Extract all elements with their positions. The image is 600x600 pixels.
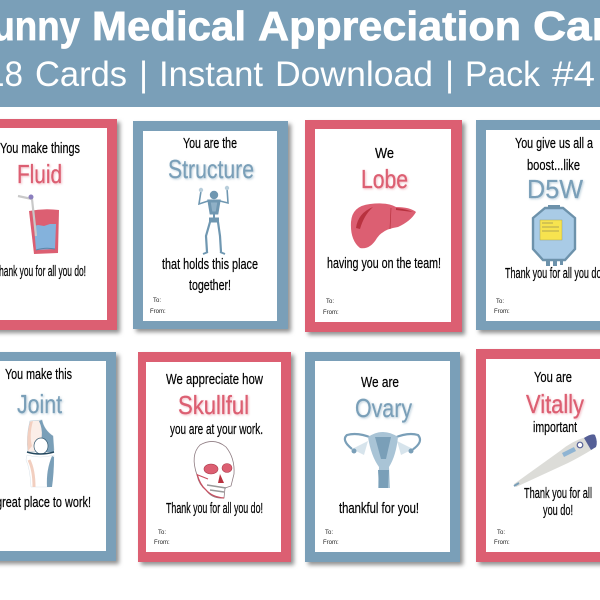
- subtitle: #4: [552, 55, 595, 94]
- icon: glass with straw: [18, 194, 59, 254]
- icon: liver: [351, 203, 416, 248]
- card: Skullful: you are at your work.: [170, 421, 263, 438]
- icon: uterus: [345, 432, 420, 488]
- card: Structure: Structure: [168, 154, 254, 184]
- card: Ovary: thankful for you!: [339, 500, 419, 517]
- card: D5W: [476, 120, 600, 330]
- card: Vitally: important: [533, 419, 578, 436]
- card: Vitally: You are: [534, 369, 572, 386]
- card: Skullful: To:: [158, 530, 166, 536]
- card: Fluid: Fluid: [17, 159, 62, 189]
- card: Structure: You are the: [183, 135, 237, 152]
- card: Vitally: Vitally: [526, 389, 584, 419]
- header banner: [0, 0, 600, 107]
- icon: IV bag: [533, 205, 575, 266]
- card: Lobe: Lobe: [361, 164, 408, 194]
- card: Ovary: To:: [325, 530, 333, 536]
- card: Ovary: We are: [361, 374, 399, 391]
- card: Structure: that holds this place: [162, 256, 258, 273]
- card: Vitally: you do!: [543, 502, 573, 519]
- card: Skullful: [138, 352, 291, 562]
- subtitle: Instant: [159, 55, 263, 94]
- icon: skeleton: [199, 186, 229, 254]
- card: Lobe: [305, 120, 462, 332]
- card: Lobe: From:: [323, 310, 339, 316]
- title: Medical: [92, 3, 246, 49]
- subtitle: |: [139, 55, 148, 94]
- card: Skullful: Thank you for all you do!: [166, 500, 263, 517]
- subtitle: |: [445, 55, 454, 94]
- icon: knee joint: [26, 420, 54, 487]
- subtitle: Download: [275, 55, 433, 94]
- card: Structure: together!: [189, 277, 231, 294]
- card: Fluid: [0, 119, 117, 330]
- subtitle: Cards: [35, 55, 127, 94]
- card: Skullful: From:: [154, 540, 170, 546]
- card: Joint: Joint: [17, 389, 63, 419]
- card: Structure: From:: [150, 309, 166, 315]
- card: D5W: D5W: [527, 174, 583, 204]
- card: Ovary: [305, 352, 460, 562]
- card: Joint: You make this: [5, 366, 72, 383]
- card: D5W: To:: [496, 299, 504, 305]
- card: Vitally: From:: [494, 540, 510, 546]
- card: Fluid: You make things: [0, 140, 80, 157]
- subtitle: Pack: [465, 55, 540, 94]
- card: D5W: From:: [494, 309, 510, 315]
- card: Skullful: Skullful: [178, 390, 249, 420]
- title: Appreciation: [258, 3, 521, 49]
- card: Lobe: To:: [326, 299, 334, 305]
- card: Ovary: Ovary: [355, 393, 412, 423]
- icon: skull: [194, 441, 234, 498]
- card: D5W: boost...like: [527, 157, 580, 174]
- card: Vitally: [476, 349, 600, 562]
- card: Skullful: We appreciate how: [166, 371, 263, 388]
- card: Ovary: From:: [323, 540, 339, 546]
- card: Lobe: We: [375, 145, 394, 162]
- icon: thermometer: [514, 434, 597, 487]
- card: Vitally: To:: [497, 530, 505, 536]
- card: Structure: [133, 121, 288, 329]
- card: Structure: To:: [153, 298, 161, 304]
- card: Lobe: having you on the team!: [327, 255, 441, 272]
- card: Joint: [0, 352, 116, 561]
